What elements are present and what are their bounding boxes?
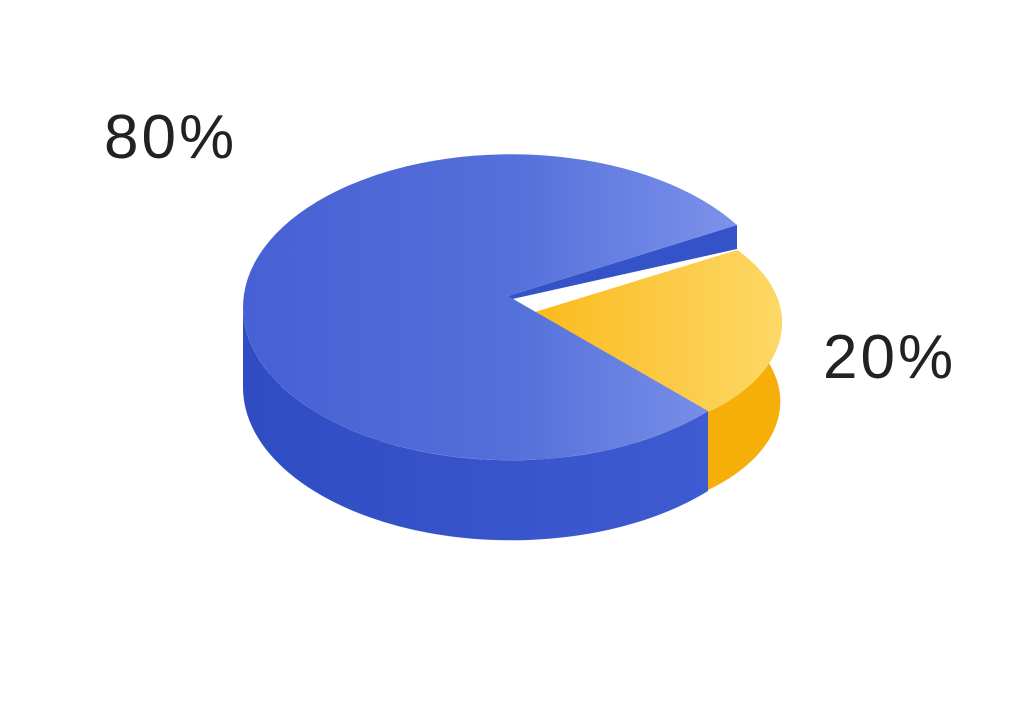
label: 80%: 80% <box>104 103 237 172</box>
slice: yellow 20% <box>535 250 782 490</box>
slice: blue 80% <box>243 154 737 540</box>
label: 20%: 20% <box>823 323 956 392</box>
